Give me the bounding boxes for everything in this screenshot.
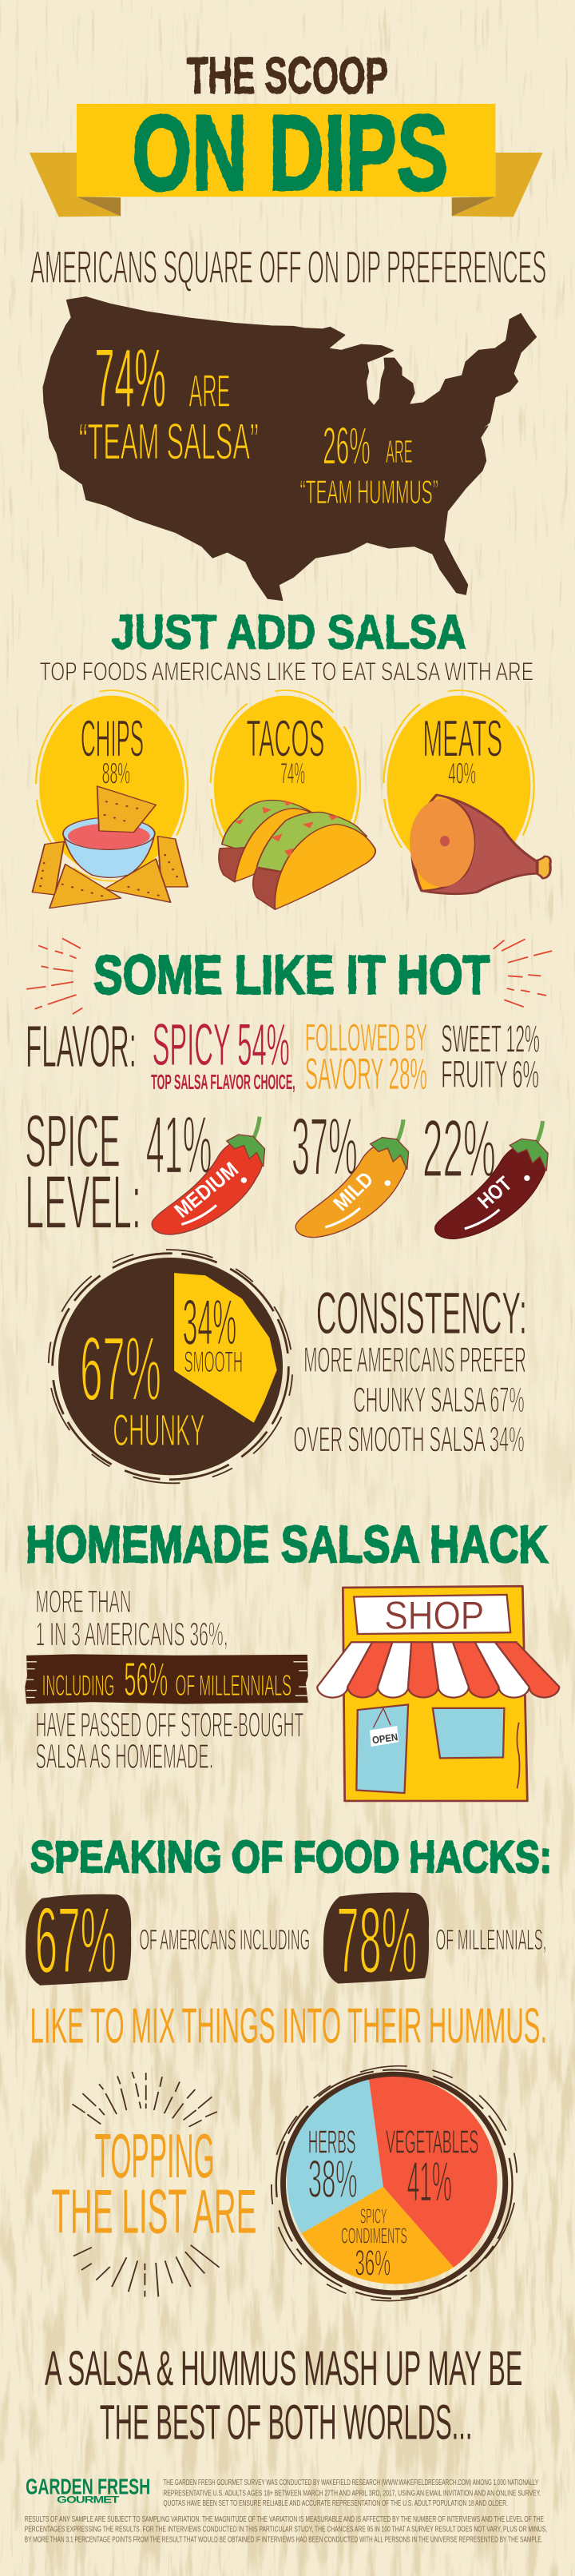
stat badge 67 percent bbox=[26, 1888, 130, 1994]
ribbon left tail bbox=[30, 153, 121, 217]
meats label: 40% bbox=[448, 757, 476, 790]
section: homemade salsa hack bbox=[25, 1516, 559, 2053]
pie sketch rings bbox=[9, 1210, 332, 1522]
pie rings bbox=[236, 2034, 553, 2332]
spicy condiments label: SPICY bbox=[360, 2204, 387, 2228]
icon: shop bbox=[317, 1586, 559, 1801]
chunky label bbox=[80, 1318, 204, 1455]
icon: red chili medium: MEDIUM bbox=[169, 1157, 243, 1222]
text: passed off store-bought bbox=[36, 1706, 303, 1776]
section: homemade salsa hack: OF AMERICANS INCLUDING bbox=[139, 1924, 310, 1956]
shop door with open sign: OPEN bbox=[371, 1731, 399, 1746]
spicy stat bbox=[151, 1012, 295, 1094]
millennials highlight banner bbox=[25, 1653, 308, 1706]
team hummus stat: “TEAM HUMMUS” bbox=[300, 473, 438, 511]
shop door with open sign bbox=[356, 1704, 408, 1793]
survey methodology note bbox=[163, 2478, 541, 2507]
section: header and map bbox=[30, 48, 546, 600]
hummus toppings pie chart: 38% bbox=[308, 2149, 358, 2208]
sun rays bbox=[72, 2072, 220, 2296]
icon: red chili medium bbox=[152, 1117, 265, 1234]
tacos sun bbox=[211, 690, 360, 881]
icon: ham bbox=[410, 795, 550, 894]
icon: orange chili mild: MILD bbox=[328, 1167, 378, 1215]
sweet and fruity stats bbox=[441, 1018, 540, 1096]
section: some like it hot: FLAVOR: bbox=[26, 1014, 137, 1080]
shop wall details bbox=[517, 1723, 520, 1788]
icon: orange chili mild bbox=[295, 1119, 409, 1238]
section: some like it hot bbox=[9, 938, 552, 1522]
consistency pie chart: 34% bbox=[183, 1287, 236, 1358]
spicy condiments label: 36% bbox=[355, 2242, 391, 2284]
team salsa stat bbox=[79, 331, 259, 471]
consistency pie chart: CHUNKY bbox=[113, 1405, 204, 1455]
chips panel bbox=[32, 690, 188, 908]
millennials highlight banner: INCLUDING bbox=[42, 1670, 114, 1703]
section: some like it hot: SPICY 54% bbox=[153, 1012, 290, 1079]
team hummus stat: ARE bbox=[386, 433, 413, 470]
meats label bbox=[422, 710, 502, 790]
section: topping the list: THE LIST ARE bbox=[51, 2176, 256, 2247]
section: just add salsa bbox=[32, 606, 550, 909]
chips sun bbox=[36, 690, 188, 881]
herbs label bbox=[308, 2124, 358, 2208]
hummus toppings pie chart bbox=[236, 2034, 553, 2332]
team salsa stat: ARE bbox=[188, 366, 230, 416]
section: homemade salsa hack: 67% bbox=[35, 1888, 117, 1994]
section: footer bbox=[25, 2474, 547, 2544]
pie chunky slice bbox=[58, 1258, 283, 1475]
heading: topping the list are bbox=[51, 2121, 256, 2247]
pie herbs slice bbox=[287, 2076, 383, 2233]
millennials highlight banner: OF MILLENNIALS bbox=[175, 1670, 291, 1703]
ribbon banner bbox=[77, 104, 495, 197]
vegetables label: 41% bbox=[407, 2149, 452, 2213]
tacos panel bbox=[211, 690, 375, 909]
chips label bbox=[81, 710, 144, 790]
hummus toppings pie chart: CONDIMENTS bbox=[341, 2224, 407, 2248]
team hummus stat bbox=[300, 416, 438, 511]
pie vegetables slice bbox=[368, 2074, 498, 2268]
logo: garden fresh gourmet: GOURMET bbox=[57, 2495, 119, 2506]
smooth label bbox=[183, 1287, 243, 1379]
logo: garden fresh gourmet bbox=[26, 2474, 150, 2506]
heading: topping the list are: TOPPING bbox=[94, 2121, 215, 2191]
team salsa stat: 74% bbox=[94, 331, 166, 425]
pie smooth slice bbox=[174, 1273, 277, 1423]
icon: tacos bbox=[219, 800, 375, 909]
section: topping the list bbox=[45, 2034, 553, 2450]
icon: dark chili hot: HOT bbox=[473, 1171, 517, 1213]
section: some like it hot: LEVEL: bbox=[25, 1160, 141, 1245]
consistency text block bbox=[293, 1281, 527, 1459]
meats sun bbox=[383, 690, 534, 881]
millennials highlight banner: 56% bbox=[124, 1653, 168, 1706]
text: more than 1 in 3 americans bbox=[36, 1584, 228, 1654]
section: some like it hot: TOP SALSA FLAVOR CHOICE, bbox=[151, 1070, 295, 1094]
closing statement bbox=[45, 2341, 522, 2450]
spicy condiments label bbox=[341, 2204, 407, 2284]
spice level label: SPICE bbox=[25, 1099, 121, 1183]
section: homemade salsa hack: 1 IN 3 AMERICANS 36%, bbox=[36, 1616, 228, 1654]
section: just add salsa: CHIPS bbox=[81, 710, 144, 768]
tacos label bbox=[247, 710, 324, 790]
team hummus stat: 26% bbox=[323, 416, 371, 475]
icon: dark chili hot bbox=[435, 1121, 548, 1238]
tacos panel: TACOS bbox=[247, 710, 324, 768]
shop building bbox=[343, 1586, 527, 1801]
stat badge 78 percent bbox=[324, 1888, 428, 1994]
map of the united states bbox=[43, 297, 536, 600]
shop awning bbox=[317, 1642, 559, 1698]
hummus toppings pie chart: HERBS bbox=[308, 2124, 355, 2161]
section: some like it hot: 41% bbox=[146, 1100, 212, 1191]
section: some like it hot: 37% bbox=[291, 1101, 358, 1192]
pie condiments slice bbox=[301, 2187, 454, 2284]
text: passed off store-bought: SALSA AS HOMEMADE. bbox=[36, 1737, 213, 1776]
shop sign: SHOP bbox=[384, 1593, 484, 1638]
meats panel bbox=[383, 690, 550, 894]
shop window bbox=[433, 1708, 504, 1758]
savory stat bbox=[305, 1017, 427, 1099]
title: on dips: ON DIPS bbox=[132, 92, 448, 213]
consistency pie chart bbox=[9, 1210, 332, 1522]
team salsa stat: “TEAM SALSA” bbox=[79, 414, 259, 471]
chunky label: 67% bbox=[80, 1318, 161, 1420]
chips label: 88% bbox=[102, 757, 130, 790]
title: the scoop: THE SCOOP bbox=[187, 48, 388, 105]
red sun rays bbox=[26, 938, 552, 1014]
logo: garden fresh gourmet: GARDEN FRESH bbox=[26, 2474, 150, 2498]
tacos label: 74% bbox=[280, 757, 305, 790]
section: homemade salsa hack: 78% bbox=[337, 1888, 418, 1994]
sampling variation note bbox=[25, 2514, 547, 2544]
spice level label bbox=[25, 1099, 141, 1245]
ribbon right tail bbox=[452, 153, 543, 217]
text: more than 1 in 3 americans: MORE THAN bbox=[36, 1584, 131, 1620]
icon: chips and salsa bowl bbox=[32, 786, 188, 908]
consistency pie chart: SMOOTH bbox=[184, 1346, 243, 1379]
vegetables label bbox=[386, 2124, 478, 2213]
